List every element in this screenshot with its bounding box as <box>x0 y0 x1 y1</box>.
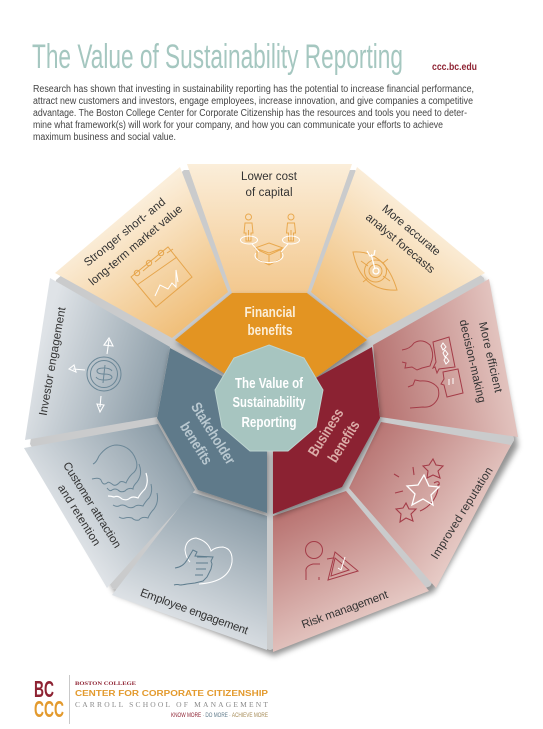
segment: business benefits: Business <box>305 406 347 460</box>
icon: hand on heart <box>174 538 232 585</box>
logo <box>34 675 269 724</box>
panel: more accurate analyst forecasts: analyst forecasts <box>363 211 437 276</box>
logo: CARROLL SCHOOL OF MANAGEMENT <box>75 700 268 709</box>
center nonagon: The Value of <box>235 375 304 392</box>
panel: more efficient decision-making: More efficient <box>476 321 504 395</box>
logo: CCC <box>34 696 64 722</box>
panel: stronger market value <box>55 167 228 338</box>
center nonagon <box>215 345 323 451</box>
panel: risk management <box>273 491 429 652</box>
panel: improved reputation: Improved reputation <box>429 465 496 562</box>
panel: customer attraction and retention: Customer attraction <box>60 460 123 551</box>
panel: investor engagement <box>25 278 170 440</box>
icon: coin with arrows <box>69 338 121 412</box>
icon: stars <box>394 459 443 522</box>
intro paragraph: advantage. The Boston College Center for Corporate Citizenship has the resources and tools you need to deter- <box>33 108 467 119</box>
segment: stakeholder benefits: Stakeholder <box>187 399 239 468</box>
segment: business benefits: benefits <box>325 418 364 466</box>
center nonagon: Reporting <box>242 414 296 431</box>
panel: lower cost of capital: of capital <box>246 187 292 199</box>
panel: risk management: Risk management <box>300 589 391 631</box>
icon: person with warning triangle <box>306 542 358 580</box>
logo: CENTER FOR CORPORATE CITIZENSHIP <box>75 689 269 698</box>
segment: financial benefits <box>175 293 367 378</box>
logo: KNOW MORE · DO MORE · ACHIEVE MORE <box>171 713 268 719</box>
panel: more accurate analyst forecasts: More accurate <box>379 203 442 258</box>
icon: overlapping heads <box>92 445 158 520</box>
panel: stronger market value: long-term market value <box>87 203 185 288</box>
panel: customer attraction and retention: and retention <box>55 483 102 548</box>
icon: calendar <box>131 247 192 307</box>
intro paragraph: maximum business and social value. <box>33 132 176 143</box>
segment: financial benefits: Financial <box>244 304 296 321</box>
center nonagon: Sustainability <box>232 394 306 411</box>
panel: more accurate analyst forecasts <box>311 167 485 338</box>
panel: employee engagement: Employee engagement <box>138 587 250 638</box>
wheel backing <box>30 170 514 650</box>
segment: stakeholder benefits: benefits <box>176 419 215 468</box>
panel: more efficient decision-making <box>373 279 518 437</box>
panel: investor engagement: Investor engagement <box>38 305 69 417</box>
intro paragraph: mine what framework(s) will work for your company, and how you can communicate your efforts to achieve <box>33 120 443 131</box>
panel: lower cost of capital <box>187 164 352 293</box>
panel: stronger market value: Stronger short- and <box>82 196 168 269</box>
panel: employee engagement <box>112 492 267 650</box>
panel: lower cost of capital: Lower cost <box>241 171 298 183</box>
intro paragraph: attract new customers and investors, engage employees, increase innovation, and give companies a competitive <box>33 96 473 107</box>
logo: BC <box>34 676 54 702</box>
logo: BOSTON COLLEGE <box>75 681 136 687</box>
icon: people and box <box>240 214 300 265</box>
intro paragraph: Research has shown that investing in sustainability reporting has the potential to increase financial performance, <box>33 84 474 95</box>
icon: two heads with speech bubbles <box>402 337 463 408</box>
segment: financial benefits: benefits <box>248 322 292 339</box>
panel: more efficient decision-making: decision-making <box>457 319 487 404</box>
segment: stakeholder benefits <box>157 348 267 513</box>
intro paragraph <box>33 84 474 143</box>
website url: ccc.bc.edu <box>432 61 477 73</box>
panel: customer attraction and retention <box>24 424 195 588</box>
segment: business benefits <box>273 347 380 514</box>
icon: eye with target <box>353 250 397 290</box>
panel: improved reputation <box>349 422 511 588</box>
